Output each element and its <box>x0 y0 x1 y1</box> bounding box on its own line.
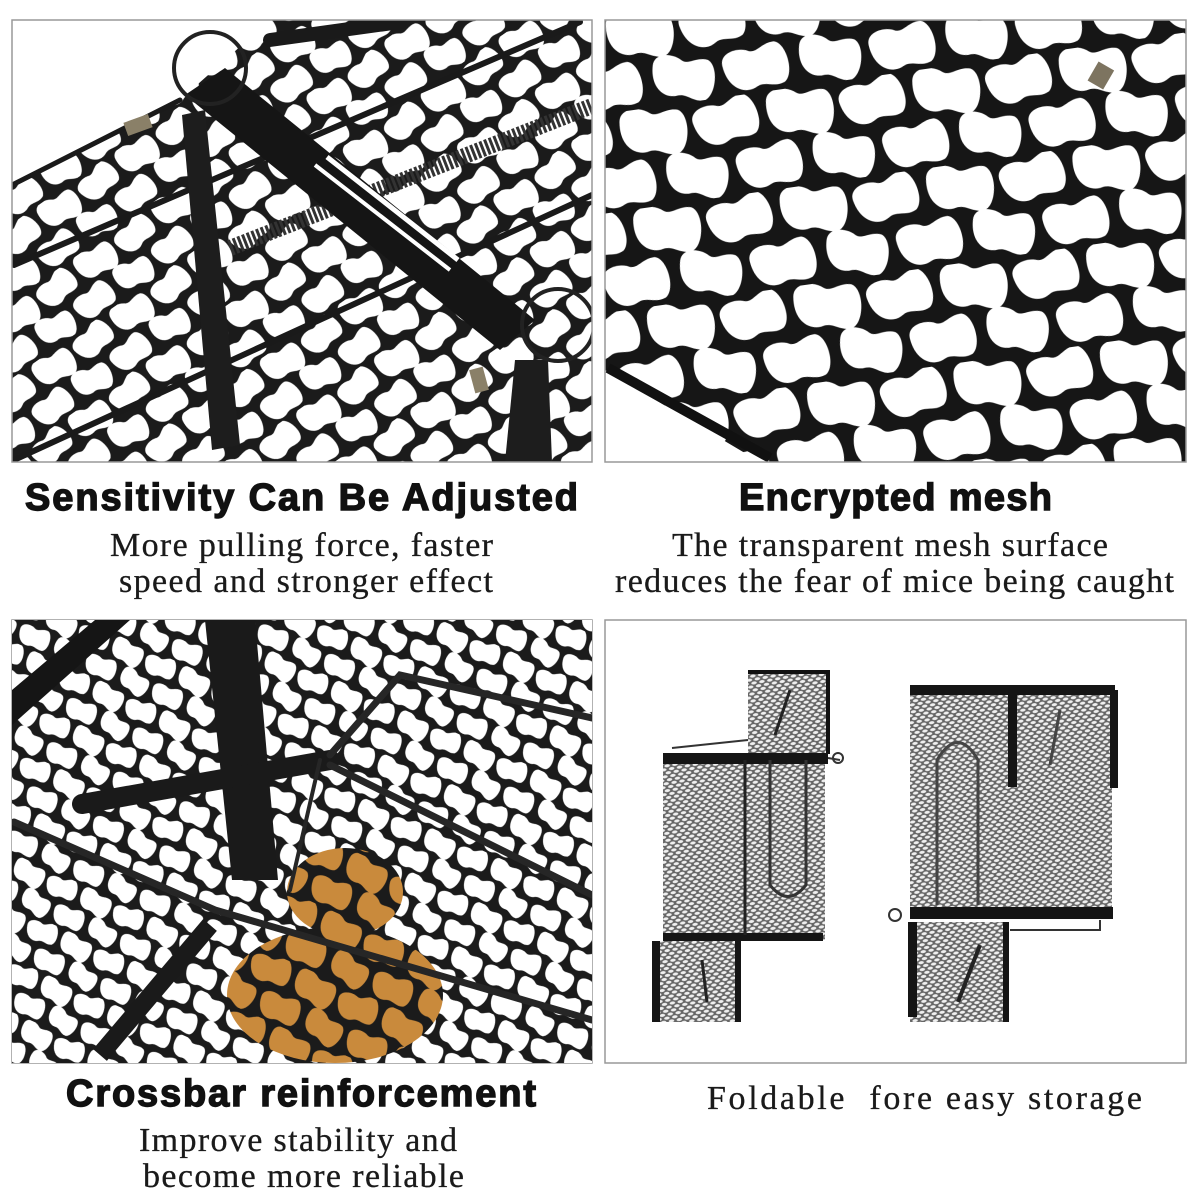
left fold: main body <box>663 740 843 941</box>
description: crossbar reinforcement: become more reliable <box>143 1158 464 1195</box>
frame rods <box>14 675 592 1020</box>
description: encrypted mesh <box>615 527 1175 600</box>
lower ribbed bar <box>100 925 210 1055</box>
panel: crossbar reinforcement photo <box>12 620 592 1063</box>
mesh surface <box>12 620 592 1063</box>
description: encrypted mesh: The transparent mesh surface <box>672 527 1108 564</box>
wire rings <box>174 32 594 361</box>
vertical strap <box>182 110 240 450</box>
description: sensitivity: speed and stronger effect <box>119 563 494 600</box>
description: crossbar reinforcement: Improve stability and <box>139 1122 457 1159</box>
lower right strap <box>505 360 552 462</box>
black strap with white stripes <box>185 68 535 350</box>
bait <box>227 848 443 1063</box>
panel: folded trap photo <box>652 672 1118 1022</box>
coil spring <box>230 106 592 248</box>
mesh close-up <box>605 20 1186 462</box>
caption: foldable storage: Foldable fore easy storage <box>707 1080 1142 1117</box>
mesh corner frame <box>608 368 770 458</box>
panel: sensitivity can be adjusted photo <box>12 20 594 462</box>
heading: crossbar reinforcement: Crossbar reinforcement <box>66 1073 536 1115</box>
mesh surface <box>12 20 592 462</box>
heading: encrypted mesh: Encrypted mesh <box>739 477 1052 519</box>
clips <box>123 114 489 393</box>
horizontal crossbar <box>82 760 330 804</box>
left fold: bottom flap <box>652 941 741 1022</box>
description: sensitivity <box>110 527 494 600</box>
panel: encrypted mesh photo <box>605 20 1186 462</box>
black corner bar <box>12 620 130 725</box>
description: encrypted mesh: reduces the fear of mice being caught <box>615 563 1175 600</box>
left fold: top flap <box>748 672 828 754</box>
clip <box>1088 61 1114 90</box>
wire rods <box>12 22 592 460</box>
right fold: bottom flap <box>908 922 1009 1022</box>
description: sensitivity: More pulling force, faster <box>110 527 494 564</box>
ribbed vertical crossbar <box>205 620 278 880</box>
right fold: main body <box>889 685 1118 930</box>
heading: sensitivity: Sensitivity Can Be Adjusted <box>25 477 578 519</box>
description: crossbar reinforcement <box>139 1122 464 1195</box>
